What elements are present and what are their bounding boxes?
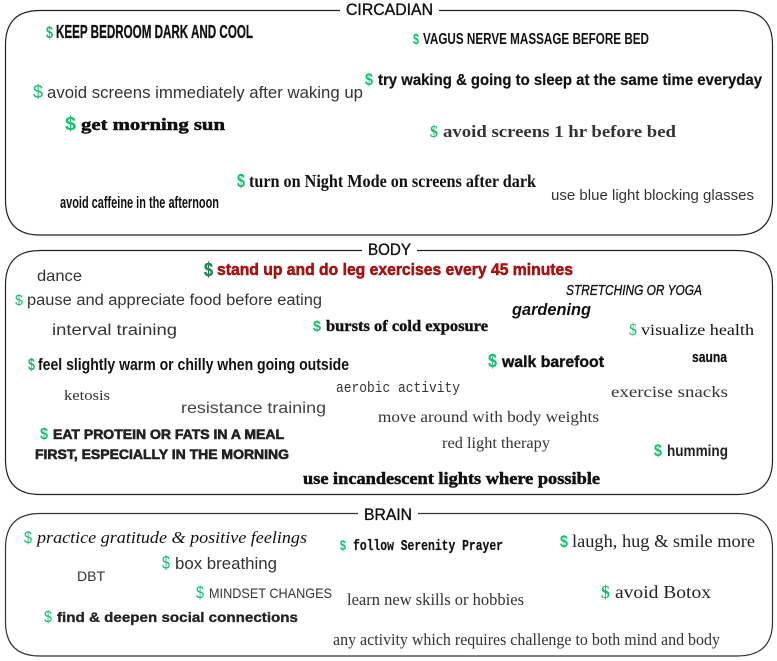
item: pause and appreciate food: $ [15,292,24,309]
item: vagus nerve massage: VAGUS NERVE MASSAGE BEFORE BED [423,31,649,48]
item: incandescent lights: use incandescent lights where possible [303,469,600,488]
heading: body: BODY [368,241,411,259]
item: eat protein or fats: FIRST, ESPECIALLY IN THE MORNING [35,447,289,462]
item: exercise snacks: exercise snacks [611,384,728,401]
item: pause and appreciate food: pause and appreciate food before eating [27,292,322,309]
item: mindset changes: MINDSET CHANGES [209,585,332,601]
item: bursts of cold exposure: bursts of cold exposure [326,318,488,335]
item: eat protein or fats: $ [40,426,48,443]
item: social connections: find & deepen social connections [57,610,298,625]
item: keep bedroom dark and cool: KEEP BEDROOM DARK AND COOL [56,22,253,42]
item: follow serenity prayer [340,537,503,555]
item: eat protein or fats: EAT PROTEIN OR FATS IN A MEAL [53,427,284,442]
item: keep bedroom dark and cool: $ [46,23,53,42]
item: follow serenity prayer: follow Serenity Prayer [353,539,503,555]
item: vagus nerve massage: $ [413,31,419,48]
item: interval training: interval training [52,322,177,339]
item: bursts of cold exposure: $ [313,318,322,335]
item: avoid screens after waking: $ [33,82,43,102]
item: avoid botox: avoid Botox [615,582,711,602]
item: get morning sun: get morning sun [81,115,226,134]
item: visualize health: $ [629,320,637,339]
item: resistance training: resistance training [181,400,326,417]
item: laugh hug smile: laugh, hug & smile more [572,531,755,551]
item: gardening: gardening [511,300,592,319]
item: ketosis: ketosis [64,388,110,404]
item: get morning sun: $ [65,114,76,135]
item: learn new skills: learn new skills or hobbies [347,590,524,609]
item: feel warm or chilly: feel slightly warm or chilly when going outside [38,356,349,374]
item: avoid screens before bed: $ [430,122,438,141]
item: DBT: DBT [77,568,105,584]
item: visualize health: visualize health [641,322,754,339]
item: social connections: $ [44,609,52,626]
item: practice gratitude: practice gratitude & positive feelings [36,528,307,547]
item: walk barefoot: $ [488,351,497,371]
panel: circadian [6,1,772,235]
item: stand up, highlighted: stand up and do leg exercises every 45 minutes [217,260,573,279]
item: dance: dance [37,268,82,285]
item: walk barefoot: walk barefoot [501,354,605,371]
item: night mode: $ [237,171,245,191]
item: humming: $ [654,441,662,460]
panel: brain [6,506,772,656]
item: feel warm or chilly: $ [28,355,35,374]
item: humming [654,441,728,460]
item: get morning sun [65,114,226,135]
heading: circadian: CIRCADIAN [346,1,433,19]
item: move around with body weights: move around with body weights [378,409,599,426]
item: practice gratitude: $ [24,528,32,547]
item: night mode: turn on Night Mode on screens after dark [249,171,536,191]
item: red light therapy: red light therapy [442,435,550,452]
item: stand up, highlighted: $ [204,260,213,281]
item: avoid botox: $ [601,582,610,602]
panel: body [6,241,772,494]
item: consistent sleep schedule: $ [365,70,373,89]
item: avoid caffeine: avoid caffeine in the afternoon [60,193,219,212]
item: avoid screens after waking: avoid screens immediately after waking up [47,83,363,102]
item: sauna: sauna [692,349,728,366]
item: box breathing: box breathing [175,555,277,573]
item: keep bedroom dark and cool [46,22,253,42]
heading: brain: BRAIN [364,506,412,524]
item: humming: humming [667,443,728,460]
item: eat protein or fats [35,426,289,462]
item: box breathing: $ [162,553,170,573]
item: mindset changes: $ [196,583,204,602]
item: stretching or yoga: STRETCHING OR YOGA [566,282,702,299]
item: blue light glasses: use blue light blocking glasses [551,187,754,204]
item: aerobic activity: aerobic activity [336,380,460,397]
item: challenge mind and body: any activity which requires challenge to both mind and body [333,630,720,649]
item: laugh hug smile: $ [560,532,568,551]
item: follow serenity prayer: $ [340,537,346,553]
item: avoid screens before bed: avoid screens 1 hr before bed [443,122,677,141]
